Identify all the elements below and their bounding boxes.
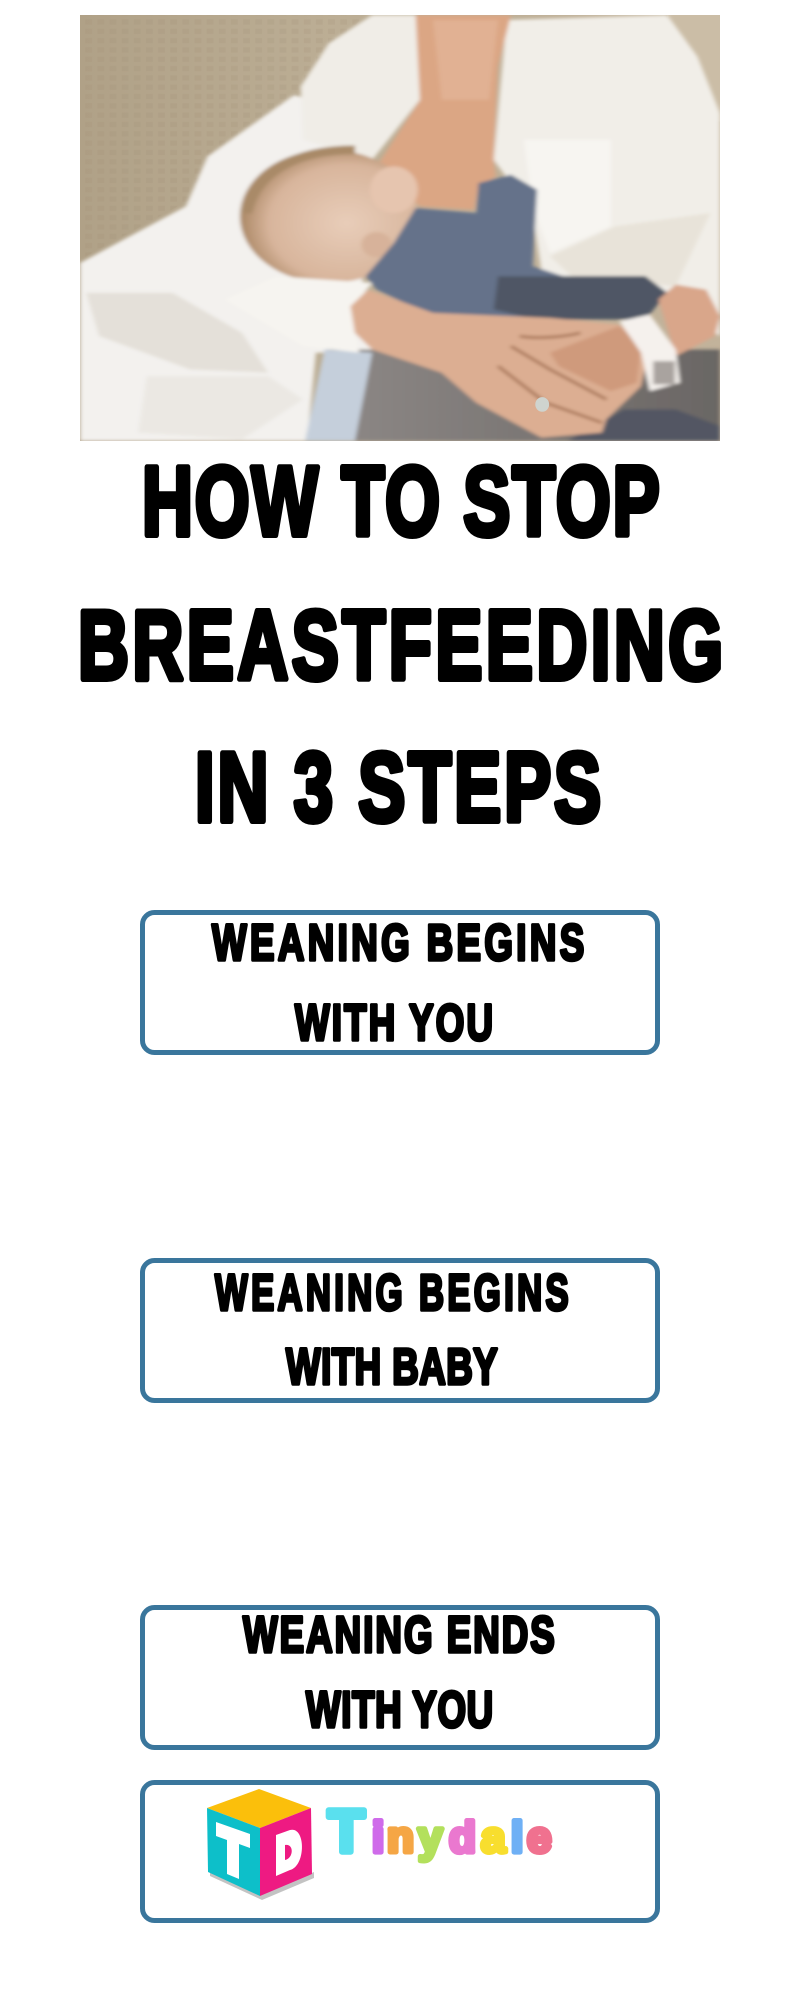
title: BREASTFEEDING — [78, 592, 723, 701]
lap — [307, 349, 720, 441]
panel: step 2 — [142, 1260, 658, 1400]
logo wordmark: d — [449, 1813, 476, 1862]
shirt — [301, 15, 420, 160]
photo: mother breastfeeding baby — [80, 15, 720, 441]
panel: step 3: WEANING ENDS — [243, 1607, 555, 1663]
panel: step 1 — [142, 912, 658, 1052]
panel: step 1: WITH YOU — [295, 995, 493, 1051]
logo wordmark: l — [511, 1813, 523, 1862]
title: IN 3 STEPS — [195, 734, 601, 843]
onesie — [364, 173, 564, 318]
logo wordmark: T — [328, 1798, 365, 1865]
watch — [619, 315, 680, 391]
panel: step 2: WITH BABY — [286, 1339, 498, 1395]
logo wordmark: i — [372, 1813, 384, 1862]
panel: step 3 — [142, 1607, 658, 1748]
icon: TD cube — [207, 1789, 314, 1900]
title — [78, 448, 723, 843]
panel: step 2: WEANING BEGINS — [215, 1266, 569, 1322]
logo wordmark: y — [418, 1813, 443, 1862]
mother's arms and hands — [351, 290, 650, 438]
sleeve — [294, 276, 374, 354]
duvet — [80, 95, 377, 441]
panel: step 3: WITH YOU — [306, 1682, 493, 1738]
panel: Tinydale logo — [142, 1782, 658, 1920]
baby head — [240, 150, 418, 283]
panel: step 1: WEANING BEGINS — [212, 915, 584, 971]
logo wordmark: e — [527, 1813, 551, 1862]
logo wordmark: n — [387, 1813, 414, 1862]
logo wordmark: a — [481, 1813, 506, 1862]
skin chest — [377, 15, 511, 210]
title: HOW TO STOP — [142, 448, 660, 557]
